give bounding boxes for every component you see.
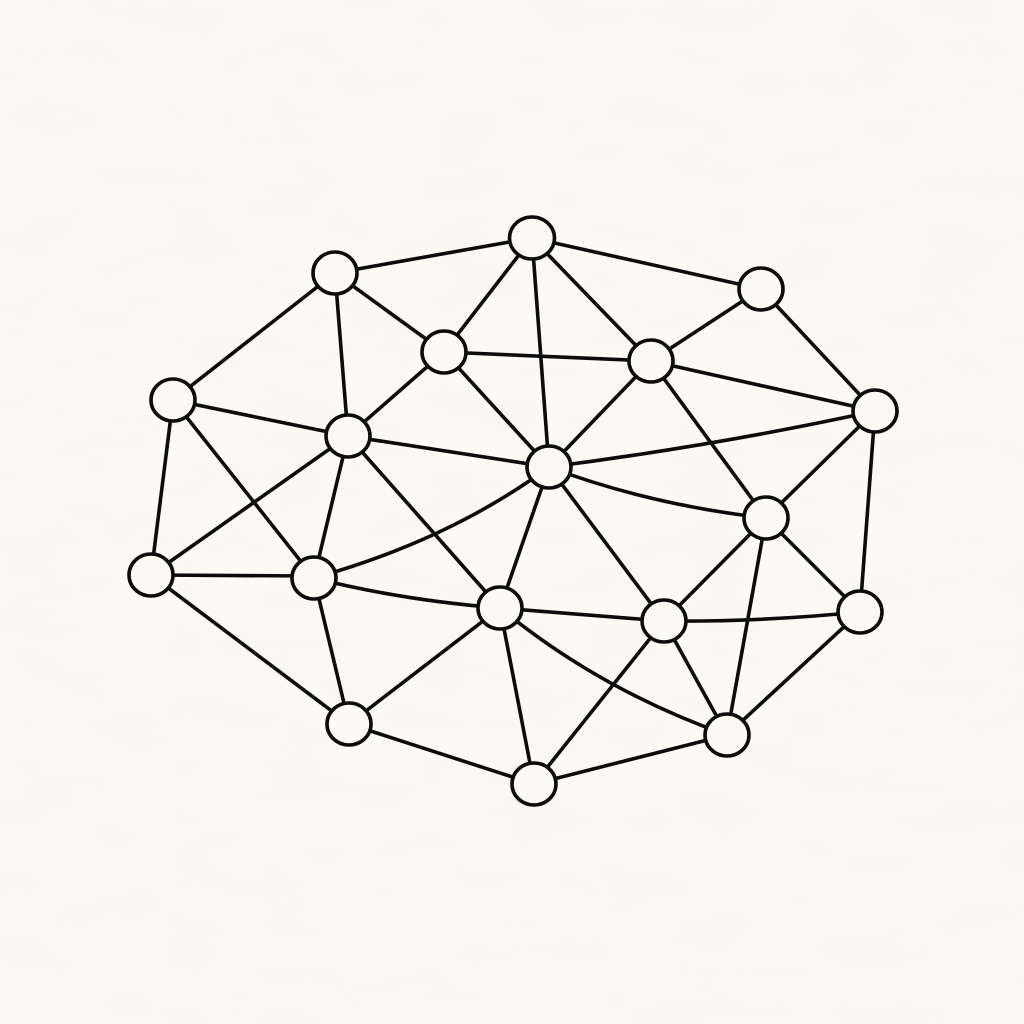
network edges: [151, 238, 875, 784]
network nodes: [129, 217, 897, 805]
